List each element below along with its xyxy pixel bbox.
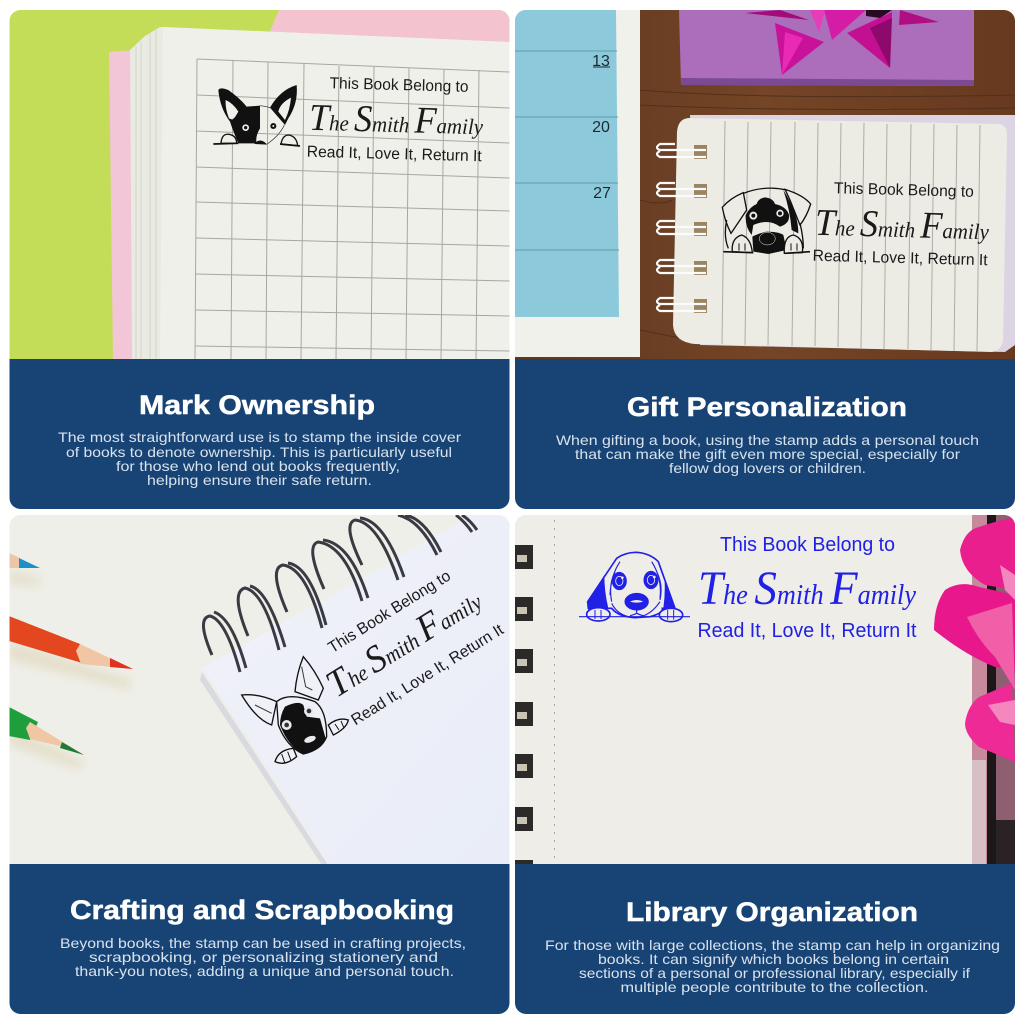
body text xyxy=(545,937,1000,995)
body text: When gifting a book, using the stamp adds a personal touch xyxy=(556,432,979,448)
calendar: 27 xyxy=(593,185,611,202)
body text: scrapbooking, or personalizing stationery and xyxy=(89,949,438,965)
calendar: 13 xyxy=(592,53,610,70)
text: stamp lines xyxy=(698,534,917,642)
pink flowers xyxy=(934,517,1015,762)
icon: peeking German shepherd xyxy=(242,657,348,763)
body text xyxy=(58,429,461,488)
body text: books. It can signify which books belong in certain xyxy=(598,951,949,967)
panel: mark ownership xyxy=(9,10,510,509)
photo: textured white notebook page xyxy=(515,515,1015,866)
spiral notebook page xyxy=(200,515,510,865)
text: stamp lines: The Smith Family xyxy=(698,562,917,615)
text: stamp lines: This Book Belong to xyxy=(834,180,974,201)
calendar xyxy=(515,10,640,357)
notebook right edge xyxy=(972,515,1015,865)
colored pencils xyxy=(9,553,133,770)
text: stamp lines: This Book Belong to xyxy=(720,534,895,556)
body text: multiple people contribute to the collection. xyxy=(620,979,928,995)
body text: of books to denote ownership. This is particularly useful xyxy=(66,444,452,460)
caption bar: mark ownership xyxy=(9,359,510,509)
body text: helping ensure their safe return. xyxy=(147,472,372,488)
spiral coils xyxy=(203,515,477,672)
photo: wooden desk background xyxy=(515,10,1015,360)
text: stamp lines: The Smith Family xyxy=(319,578,489,706)
spiral rings xyxy=(515,545,533,866)
text: stamp lines: The Smith Family xyxy=(814,202,990,248)
text: stamp lines: The Smith Family xyxy=(309,97,484,143)
text: stamp lines: This Book Belong to xyxy=(329,75,469,96)
stamp: black dog peeking with family name xyxy=(242,568,507,763)
heading: Library Organization xyxy=(626,897,918,927)
text: stamp lines xyxy=(307,75,484,165)
spiral coils xyxy=(694,145,707,313)
calendar: 20 xyxy=(592,119,610,136)
body text: thank-you notes, adding a unique and personal touch. xyxy=(75,963,454,979)
heading: Crafting and Scrapbooking xyxy=(70,895,454,925)
text: stamp lines: Read It, Love It, Return It xyxy=(698,620,917,642)
body text: For those with large collections, the stamp can help in organizing xyxy=(545,937,1000,953)
photo: open grid notebook on green and pink background xyxy=(9,10,510,360)
panel: gift personalization xyxy=(515,10,1015,509)
icon: peeking floppy-eared puppy xyxy=(579,552,690,622)
body text xyxy=(60,935,466,979)
text: stamp lines: Read It, Love It, Return It xyxy=(348,621,507,729)
text: stamp lines xyxy=(812,180,990,269)
heading: Mark Ownership xyxy=(139,390,375,420)
stamp: black dog peeking with family name xyxy=(213,75,484,165)
spiral notebook xyxy=(657,115,1015,352)
caption bar: gift personalization xyxy=(515,359,1015,509)
photo: white surface background xyxy=(9,515,510,865)
body text: sections of a personal or professional library, especially if xyxy=(579,965,970,981)
text: stamp lines: Read It, Love It, Return It xyxy=(307,144,482,165)
body text xyxy=(556,432,979,476)
text: stamp lines xyxy=(326,572,504,725)
stamp: blue dog peeking with family name xyxy=(579,534,917,642)
caption bar: crafting and scrapbooking xyxy=(9,864,510,1014)
caption bar: library organization xyxy=(515,864,1015,1014)
body text: for those who lend out books frequently, xyxy=(116,458,400,474)
body text: that can make the gift even more special, especially for xyxy=(575,446,960,462)
icon: peeking dog with pointed ears xyxy=(213,85,300,146)
body text: The most straightforward use is to stamp the inside cover xyxy=(58,429,461,445)
text: stamp lines: Read It, Love It, Return It xyxy=(812,248,988,269)
text: stamp lines: This Book Belong to xyxy=(325,568,454,657)
stamp: black dog peeking with family name xyxy=(722,180,990,269)
heading: Gift Personalization xyxy=(627,392,907,422)
body text: Beyond books, the stamp can be used in crafting projects, xyxy=(60,935,466,951)
icon: peeking floppy-eared dog xyxy=(722,188,811,254)
panel: crafting and scrapbooking xyxy=(9,515,510,1014)
gift box with pink bow xyxy=(679,10,974,86)
body text: fellow dog lovers or children. xyxy=(669,460,866,476)
panel: library organization xyxy=(515,515,1015,1014)
